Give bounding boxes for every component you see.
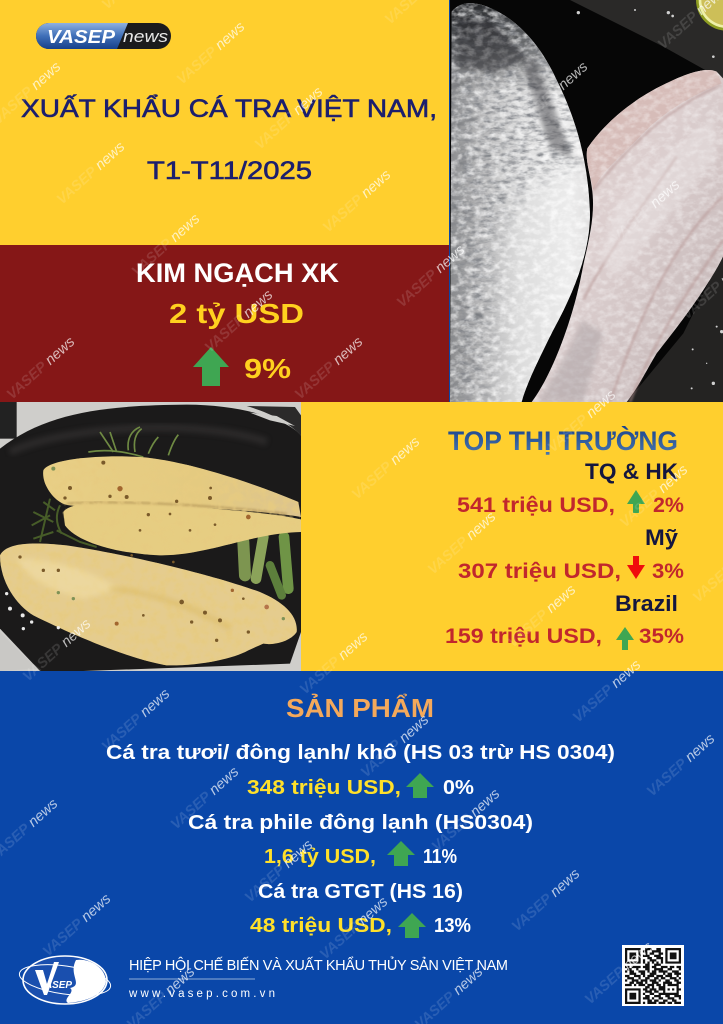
export value block: KIM NGẠCH XK [136, 258, 340, 288]
herbs [88, 427, 178, 457]
watermarks: VASEP news [242, 837, 316, 906]
panel: top markets background [301, 402, 723, 671]
watermarks: VASEP news [505, 582, 579, 651]
footer: website: www.vasep.com.vn [128, 988, 275, 1000]
panel: export value background [0, 245, 449, 402]
watermarks: VASEP news [99, 686, 173, 755]
products block: 48 triệu USD, [250, 915, 392, 937]
top markets block: TOP THỊ TRƯỜNG [448, 425, 678, 456]
products block: SẢN PHẨM [286, 693, 434, 723]
logo: VASEP association: ASEP [44, 979, 73, 991]
products block: 1,6 tỷ USD, [264, 846, 376, 868]
logo: VASEP news: news [123, 27, 169, 46]
fillet bottom [0, 543, 297, 665]
watermarks: VASEP news [644, 731, 718, 800]
fillet right [532, 70, 723, 402]
export value block [136, 258, 340, 386]
watermarks: VASEP news [545, 387, 619, 456]
top markets block [445, 425, 684, 650]
products block: Cá tra phile đông lạnh (HS0304) [188, 812, 533, 834]
top markets block: TQ & HK [585, 459, 678, 484]
watermarks: VASEP news [168, 764, 242, 833]
top markets block: 2% [653, 493, 684, 517]
icon: down arrow [627, 556, 645, 579]
icon: up arrow [627, 490, 645, 513]
products block: 11% [423, 846, 457, 868]
asparagus [243, 537, 288, 595]
logo: VASEP news: VASEP [47, 27, 116, 47]
top markets block: 307 triệu USD, [458, 559, 621, 583]
logo: VASEP news [36, 23, 171, 49]
watermarks: VASEP news [129, 211, 203, 280]
export value block: 9% [244, 353, 291, 384]
watermarks: VASEP news [517, 59, 591, 128]
panel: title background [0, 0, 449, 245]
watermarks: VASEP news [582, 939, 656, 1008]
watermarks: VASEP news [570, 657, 644, 726]
panel: products background [0, 671, 723, 1024]
watermarks: VASEP news [40, 891, 114, 960]
watermarks: VASEP news [54, 139, 128, 208]
watermarks: VASEP news [509, 866, 583, 935]
icon: up arrow [406, 773, 434, 798]
title: T1-T11/2025 [147, 157, 312, 185]
watermarks: VASEP news [320, 167, 394, 236]
export value block: 2 tỷ USD [169, 298, 304, 329]
footer: association name: HIỆP HỘI CHẾ BIẾN VÀ XUẤT KHẨU THỦY SẢN VIỆT NAM [129, 956, 508, 974]
title [21, 94, 437, 185]
watermarks: VASEP news [425, 509, 499, 578]
QR code [622, 945, 684, 1006]
products block: Cá tra GTGT (HS 16) [258, 881, 463, 903]
top markets block: 3% [652, 559, 684, 583]
photo: raw pangasius fillets [449, 0, 723, 402]
fillet middle [63, 502, 301, 555]
products block [106, 693, 615, 938]
logo: VASEP association [17, 956, 113, 1004]
top markets block: 159 triệu USD, [445, 624, 602, 648]
watermarks: VASEP news [609, 177, 683, 246]
watermarks: VASEP news [317, 894, 391, 963]
watermarks: VASEP news [617, 462, 691, 531]
watermarks: VASEP news [174, 19, 248, 88]
watermarks: VASEP news [349, 434, 423, 503]
icon: up arrow [398, 913, 426, 938]
products block: 348 triệu USD, [247, 777, 401, 799]
watermarks: VASEP news [292, 334, 366, 403]
watermarks: VASEP news [20, 616, 94, 685]
top markets block: Mỹ [645, 525, 679, 550]
products block: 13% [434, 915, 471, 937]
products block: 0% [443, 777, 474, 799]
watermarks: VASEP news [429, 786, 503, 855]
top markets block: 35% [639, 624, 684, 648]
fillet left [450, 3, 590, 402]
title: XUẤT KHẨU CÁ TRA VIỆT NAM, [21, 94, 437, 123]
watermarks: VASEP news [202, 287, 276, 356]
top markets block: Brazil [615, 591, 678, 616]
icon: up arrow [387, 841, 415, 866]
fillet top [43, 456, 301, 517]
watermarks: VASEP news [4, 334, 78, 403]
photo: pan-seared fillets [0, 402, 301, 671]
watermarks: VASEP news [297, 629, 371, 698]
watermarks: VASEP news [252, 84, 326, 153]
top markets block: 541 triệu USD, [457, 493, 615, 517]
watermarks: VASEP news [358, 712, 432, 781]
icon: up arrow [193, 347, 229, 386]
watermarks: VASEP news [394, 242, 468, 311]
products block: Cá tra tươi/ đông lạnh/ khô (HS 03 trừ HS 0304) [106, 742, 615, 764]
icon: up arrow [616, 627, 634, 650]
